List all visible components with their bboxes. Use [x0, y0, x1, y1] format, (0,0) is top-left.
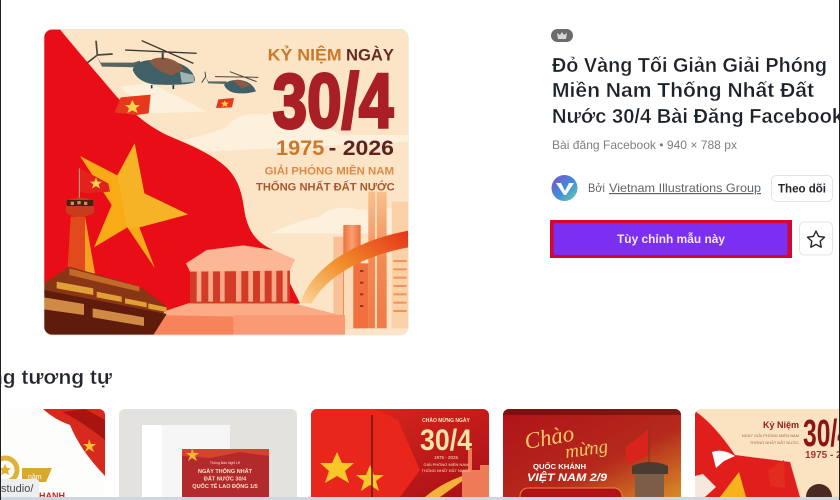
right window edge	[839, 0, 840, 500]
thumbnail 5: Kỷ niệm 30/4: NGÀY GIẢI PHÓNG MIỀN NAM	[742, 433, 799, 438]
template title	[552, 54, 840, 128]
poster heading text: THỐNG NHẤT ĐẤT NƯỚC	[256, 179, 395, 193]
poster heading text: KỶ NIỆM	[268, 46, 342, 65]
thumbnail 2: poster mockup on grey: QUỐC TẾ LAO ĐỘNG 1/5	[192, 482, 258, 490]
thumbnail 4: Chào mừng Quốc khánh: VIỆT NAM 2/9	[527, 471, 608, 484]
thumbnail 4: Chào mừng Quốc khánh	[503, 409, 681, 500]
author credit: Bởi	[588, 181, 605, 195]
script greeting: Chào	[523, 421, 576, 454]
poster heading text: GIẢI PHÓNG MIỀN NAM	[265, 165, 394, 178]
red flag	[44, 29, 300, 335]
status URL tooltip: studio/	[1, 483, 34, 495]
poster heading text: 1975	[276, 136, 324, 160]
favourite star button	[800, 222, 832, 255]
clouds	[120, 83, 408, 233]
thumbnail 2: poster mockup on grey: NGÀY THỐNG NHẤT	[198, 468, 253, 475]
poster: 30/4 artwork	[44, 29, 408, 335]
thumbnail 2: poster mockup on grey: ĐẤT NƯỚC 30/4	[204, 474, 247, 482]
flag star	[80, 143, 188, 268]
thumbnail 2: poster mockup on grey: Thông Báo Nghỉ Lễ	[210, 460, 240, 465]
thumbnail 3: red 30/4 poster: 1975 - 2025	[434, 455, 459, 460]
thumbnail 5: Kỷ niệm 30/4: THỐNG NHẤT ĐẤT NƯỚC	[750, 440, 799, 445]
author credit: Vietnam Illustrations Group	[609, 181, 761, 195]
poster heading text: - 2026	[329, 136, 394, 160]
poster heading text: NGÀY	[346, 46, 394, 65]
poster background	[44, 29, 408, 335]
helicopter large	[87, 41, 197, 89]
bottom window edge	[0, 497, 840, 500]
poster heading text	[256, 46, 395, 193]
thumbnail 3: red 30/4 poster: THỐNG NHẤT ĐẤT NƯỚC	[421, 468, 471, 473]
status URL tooltip	[0, 479, 39, 497]
small flags carried by helicopters	[115, 95, 234, 115]
thumbnail 3: red 30/4 poster: CHÀO MỪNG NGÀY	[422, 417, 471, 424]
thumbnail 5: Kỷ niệm 30/4	[695, 409, 840, 500]
template title: Miền Nam Thống Nhất Đất	[552, 79, 814, 102]
thumbnail 5: Kỷ niệm 30/4: Kỷ Niệm	[763, 420, 799, 430]
left window edge	[0, 0, 1, 500]
helicopter small	[202, 72, 258, 93]
city skyline	[300, 192, 408, 330]
thumbnail 3: red 30/4 poster: GIẢI PHÓNG MIỀN NAM	[424, 462, 468, 467]
script greeting	[526, 427, 607, 458]
template title: Đỏ Vàng Tối Giản Giải Phóng	[552, 54, 827, 77]
thumbnail 3: red 30/4 poster	[311, 409, 489, 497]
flag tower	[44, 168, 167, 335]
poster border	[44, 29, 408, 335]
customize button with red highlight: Tùy chỉnh mẫu này	[617, 231, 725, 246]
thumbnail 1: white card with flag corner	[0, 409, 105, 500]
mausoleum	[153, 245, 345, 335]
author avatar	[552, 175, 578, 201]
customize button with red highlight	[550, 220, 792, 258]
follow button: Theo dõi	[778, 182, 826, 196]
poster heading text: 30/4	[273, 58, 393, 144]
script greeting: mừng	[564, 436, 609, 463]
thumbnail 1: white card with flag corner: năm	[28, 474, 42, 481]
premium crown badge	[551, 29, 573, 42]
thumbnail 3: red 30/4 poster: 30/4	[420, 424, 472, 457]
thumbnail 4: Chào mừng Quốc khánh: QUỐC KHÁNH	[533, 461, 586, 471]
thumbnail 2: poster mockup on grey	[119, 409, 297, 497]
follow button	[772, 176, 832, 202]
template format and size: Bài đăng Facebook • 940 × 788 px	[552, 138, 737, 152]
